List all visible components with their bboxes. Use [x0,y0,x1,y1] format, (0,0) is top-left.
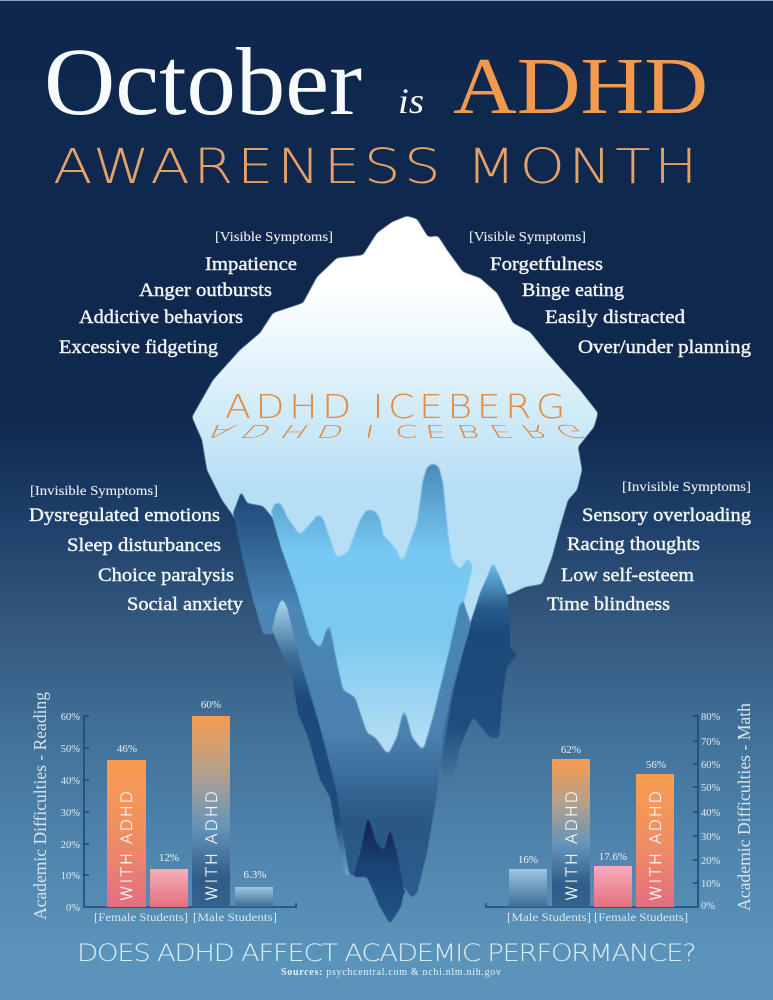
label reflection: G [547,421,593,441]
visible symptoms right [469,229,752,358]
symptom: Social anxiety [127,594,244,615]
subtitle: AWARENESS MONTH [53,139,697,195]
group labels [507,910,688,924]
title word: October: October [44,28,362,135]
bar: male with ADHD 60%: 60% [201,699,221,711]
axis labels: 40% [61,776,80,787]
group labels: [Male Students] [507,910,591,924]
iceberg: middle layer [233,491,471,898]
invisible symptoms left [29,483,244,615]
symptom: Sleep disturbances [67,535,221,556]
bar: male with ADHD 62%: WITH ADHD [562,791,581,901]
axis labels: 10% [61,871,80,882]
symptom: Addictive behaviors [79,307,243,328]
symptom: Forgetfulness [490,254,603,275]
label reflection: E [423,420,448,441]
bar: female with ADHD 46%: WITH ADHD [117,791,136,901]
symptom: Dysregulated emotions [29,505,220,526]
axis labels: 20% [61,840,80,851]
symptom: Racing thoughts [567,534,700,555]
group labels [94,910,277,924]
bar: female with ADHD 46% [107,743,146,907]
symptom: Sensory overloading [582,505,752,526]
bar: male without ADHD 6.3% [235,869,273,907]
title word: is: is [398,81,424,121]
bar: male with ADHD 60% [192,699,230,907]
sources: Sources: psychcentral.com & ncbi.nlm.nih.gov [281,967,501,978]
bar: female without ADHD 12%: 12% [159,852,179,864]
symptom: Impatience [205,254,297,275]
axis labels: 30% [61,808,80,819]
axes [486,716,698,907]
heading: [Visible Symptoms] [215,229,333,244]
iceberg: visible ice body [192,216,598,640]
heading: [Invisible Symptoms] [30,483,158,498]
axis labels: 60% [701,760,720,771]
iceberg: right navy band [440,562,517,795]
bar: female with ADHD 56%: WITH ADHD [646,791,665,901]
bar chart: math [486,703,754,924]
axis labels: 10% [701,879,720,890]
heading: [Invisible Symptoms] [622,479,751,494]
bar: male without ADHD 16% [509,854,547,907]
label reflection: C [395,420,418,441]
symptom: Choice paralysis [98,565,234,586]
bar: male with ADHD 62%: 62% [561,744,581,756]
bar: female with ADHD 56% [636,759,674,907]
axis labels: 20% [701,856,720,867]
label reflection: E [484,420,517,441]
axis title: Academic Difficulties - Math [734,703,754,911]
bar: male without ADHD 16%: 16% [518,854,538,866]
axis labels: 50% [61,744,80,755]
iceberg: dark bottom tip [353,816,413,924]
bar: female without ADHD 17.6% [594,851,632,907]
bar: male without ADHD 6.3%: 6.3% [244,869,266,881]
label reflection: A [198,420,244,441]
axis labels: 60% [61,712,80,723]
label reflection [198,420,593,442]
label reflection: B [453,420,483,441]
iceberg [192,216,598,924]
label reflection: I [363,420,377,441]
label reflection: H [275,421,315,442]
axis labels: 0% [66,903,80,914]
bar: female with ADHD 56%: 56% [646,759,666,771]
group labels: [Female Students] [594,910,688,924]
axis labels: 30% [701,832,720,843]
axis labels: 70% [701,737,720,748]
bar: female with ADHD 46%: 46% [117,743,137,755]
iceberg label [198,388,593,442]
symptom: Time blindness [547,594,670,615]
bar: female without ADHD 12% [150,852,188,907]
symptom: Over/under planning [578,337,752,358]
symptom: Anger outbursts [139,280,272,301]
label reflection: D [313,420,349,441]
label text: ADHD ICEBERG [225,388,565,426]
title [44,28,708,135]
group labels: [Female Students] [94,910,188,924]
invisible symptoms right [547,479,752,615]
symptom: Low self-esteem [561,565,694,586]
symptom: Binge eating [522,280,625,301]
symptom: Excessive fidgeting [59,337,219,358]
axis labels: 80% [701,712,720,723]
axis labels: 40% [701,808,720,819]
bar: male with ADHD 60%: WITH ADHD [202,791,221,901]
label reflection: D [234,421,279,442]
iceberg: left spike band [272,598,356,877]
bar chart: reading [30,692,296,924]
axis title: Academic Difficulties - Reading [30,692,50,920]
group labels: [Male Students] [193,910,277,924]
title word: ADHD: ADHD [453,41,708,131]
axis labels [61,712,80,914]
axes [84,716,296,907]
axis labels: 50% [701,783,720,794]
bar: female without ADHD 17.6%: 17.6% [599,851,627,863]
heading: [Visible Symptoms] [469,229,586,244]
bar: male with ADHD 62% [552,744,590,907]
iceberg: central light layer [271,463,473,755]
axis labels: 0% [701,901,715,912]
axis labels [701,712,720,912]
label reflection: R [514,421,554,441]
question heading: DOES ADHD AFFECT ACADEMIC PERFORMANCE? [77,940,697,967]
symptom: Easily distracted [545,307,686,328]
visible symptoms left [59,229,333,358]
